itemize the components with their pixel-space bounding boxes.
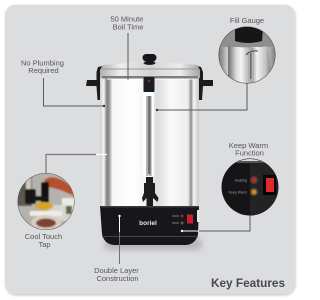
- leader: fill gauge: [156, 83, 247, 111]
- heading: no plumbing required: Required: [28, 66, 59, 75]
- indicator label: keep warm: Keep Warm: [229, 190, 247, 194]
- fill gauge tube: [143, 77, 154, 177]
- base controls: [172, 210, 200, 224]
- hand: [44, 177, 74, 196]
- leader: keep warm function: [181, 215, 250, 232]
- heading: keep warm function: Function: [235, 148, 264, 158]
- leader: no plumbing required: [44, 78, 105, 107]
- icon: left handle: [86, 66, 103, 100]
- indicator labels: Heating: [235, 178, 247, 182]
- indicator lights: [250, 176, 258, 196]
- urn taps: [25, 189, 36, 204]
- bowl: [30, 211, 62, 216]
- power switch: [263, 175, 276, 195]
- logo: boriel: [139, 220, 157, 227]
- heading: double layer construction: Double Layer: [94, 266, 139, 275]
- leader: 50 minute boil time: [127, 33, 129, 82]
- leader: cool touch tap: [46, 154, 107, 173]
- heading: 50 minute boil time: 50 Minute: [110, 14, 143, 24]
- product: urn: [86, 54, 213, 250]
- inset: keep warm closeup: [221, 158, 280, 217]
- inset: cool touch tap photo: [17, 172, 76, 232]
- urn lid: [100, 62, 200, 80]
- inset: fill gauge closeup: [218, 26, 276, 84]
- heading: no plumbing required: No Plumbing: [21, 58, 64, 68]
- icon: tap: [142, 177, 158, 208]
- icon: lid knob: [142, 54, 156, 65]
- urn base: [100, 206, 200, 245]
- heading: key features: Key Features: [211, 276, 285, 290]
- heading: cool touch tap: Tap: [38, 240, 51, 249]
- heading: cool touch tap: Cool Touch: [25, 232, 62, 241]
- heading: fill gauge: Fill Gauge: [230, 16, 264, 25]
- heading: double layer construction: Construction: [96, 274, 139, 283]
- icon: right handle: [197, 66, 213, 100]
- yellow food: [35, 202, 53, 210]
- leader: double layer construction: [118, 215, 121, 264]
- heading: 50 minute boil time: Boil Time: [113, 22, 143, 32]
- urn body: [100, 75, 199, 210]
- heading: keep warm function: Keep Warm: [229, 141, 268, 150]
